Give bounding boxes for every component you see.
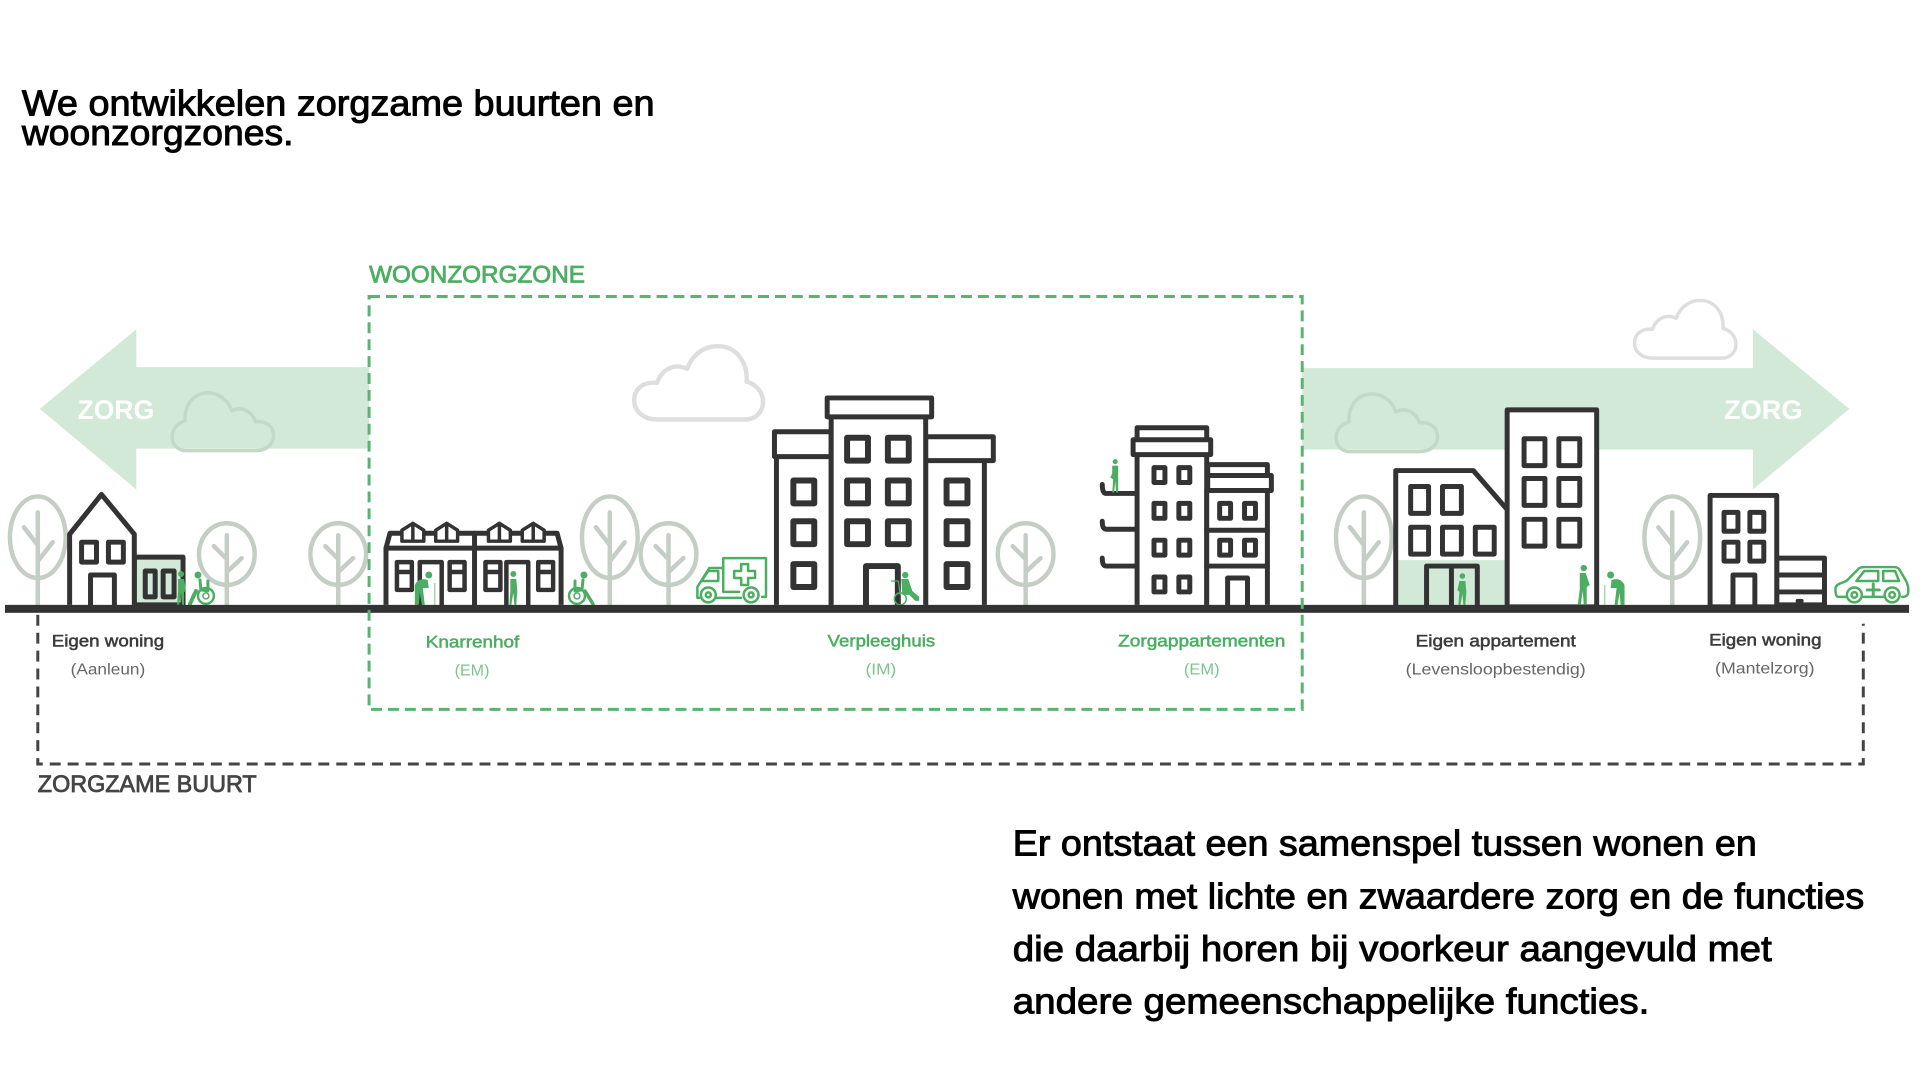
body text: die daarbij horen bij voorkeur aangevuld met <box>1013 929 1772 969</box>
label: eigen woning aanleun: Eigen woning <box>52 632 164 651</box>
label: eigen woning mantelzorg <box>1709 631 1822 678</box>
label: zorgappartementen <box>1118 632 1285 679</box>
cloud right <box>1336 394 1438 452</box>
building: verpleeghuis <box>774 398 993 605</box>
building: eigen woning aanleun <box>70 494 183 605</box>
label: knarrenhof: Knarrenhof <box>426 633 520 652</box>
arrow: zorg left: ZORG <box>78 395 154 425</box>
label: eigen woning mantelzorg: (Mantelzorg) <box>1715 661 1815 678</box>
label: eigen woning mantelzorg: Eigen woning <box>1709 631 1822 650</box>
arrow: zorg left <box>40 329 369 489</box>
woonzorgzone dashed frame <box>369 262 1302 709</box>
label: verpleeghuis: Verpleeghuis <box>828 632 935 651</box>
cloud centre <box>634 346 763 419</box>
label: zorgappartementen: (EM) <box>1184 662 1220 679</box>
person on balcony <box>1110 459 1118 492</box>
woonzorgzone dashed frame: WOONZORGZONE <box>369 262 585 289</box>
person in wheelchair at verpleeghuis <box>891 572 919 605</box>
building: zorgappartementen <box>1102 428 1271 605</box>
body text: wonen met lichte en zwaardere zorg en de functies <box>1012 876 1864 916</box>
person and wheelchair at eigen woning <box>177 571 214 605</box>
label: eigen woning aanleun: (Aanleun) <box>71 662 145 679</box>
label: verpleeghuis: (IM) <box>865 662 896 679</box>
label: knarrenhof: (EM) <box>455 662 489 679</box>
title: We ontwikkelen zorgzame buurten en <box>22 83 655 123</box>
people at eigen appartement <box>1457 565 1625 605</box>
building: eigen appartement <box>1396 410 1597 607</box>
cloud top right <box>1634 300 1736 358</box>
label: knarrenhof <box>426 633 520 679</box>
label: eigen appartement <box>1406 632 1586 679</box>
label: eigen woning aanleun <box>52 632 164 679</box>
body text: andere gemeenschappelijke functies. <box>1013 982 1649 1022</box>
arrow: zorg right: ZORG <box>1724 395 1803 425</box>
building: eigen woning mantelzorg <box>1710 495 1824 607</box>
zorgzame buurt dashed frame <box>38 615 1863 798</box>
body text <box>1012 824 1864 1022</box>
trees <box>10 496 1700 605</box>
building: knarrenhof <box>386 523 561 605</box>
ground line <box>5 605 1909 613</box>
label: eigen appartement: (Levensloopbestendig) <box>1406 662 1586 679</box>
icon: car <box>1835 567 1908 602</box>
people at knarrenhof <box>415 571 593 605</box>
title: woonzorgzones. <box>21 113 293 153</box>
icon: ambulance <box>697 558 766 602</box>
zorgzame buurt dashed frame: ZORGZAME BUURT <box>38 771 257 798</box>
label: verpleeghuis <box>828 632 935 679</box>
arrow: zorg right <box>1302 329 1849 489</box>
label: zorgappartementen: Zorgappartementen <box>1118 632 1285 651</box>
cloud left <box>172 393 274 451</box>
body text: Er ontstaat een samenspel tussen wonen en <box>1013 824 1757 864</box>
title <box>21 83 655 153</box>
label: eigen appartement: Eigen appartement <box>1416 632 1576 651</box>
